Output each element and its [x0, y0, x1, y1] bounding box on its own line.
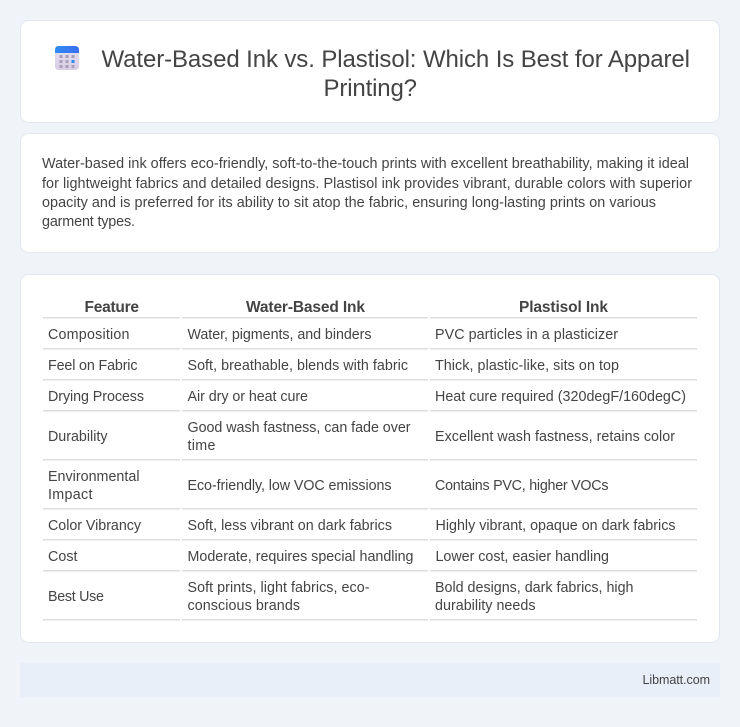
row: cost: Lower cost, easier handling: [436, 549, 609, 565]
row: durability: Good wash fastness, can fade over: [188, 420, 411, 436]
table header: Plastisol Ink: [519, 299, 608, 316]
row: composition: Water, pigments, and binders: [188, 327, 372, 343]
row: composition: [48, 327, 618, 343]
panel: summary text: [20, 134, 720, 252]
row: best use: Bold designs, dark fabrics, high: [435, 580, 634, 596]
panel: summary text: opacity and is preferred for its ability to sit atop the fabric, ensuring long-lasting prints on various: [42, 195, 656, 211]
row: durability: Durability: [48, 429, 108, 445]
title: Printing?: [324, 75, 417, 102]
row: composition: Composition: [48, 327, 130, 343]
row: best use: Soft prints, light fabrics, eco-: [188, 580, 370, 596]
footer: [20, 663, 720, 697]
row: color vibrancy: Soft, less vibrant on dark fabrics: [188, 518, 392, 534]
row: environmental impact: Impact: [48, 487, 93, 503]
panel: comparison table: [20, 274, 720, 642]
row: composition: PVC particles in a plasticizer: [435, 327, 618, 343]
row: drying process: Air dry or heat cure: [188, 389, 308, 405]
row: color vibrancy: Highly vibrant, opaque on dark fabrics: [436, 518, 676, 534]
row: drying process: Heat cure required (320degF/160degC): [435, 389, 686, 405]
row: feel on fabric: Feel on Fabric: [48, 358, 138, 374]
table header: [84, 299, 608, 316]
footer: Libmatt.com: [642, 673, 710, 687]
row: environmental impact: [48, 469, 608, 503]
row: feel on fabric: Thick, plastic-like, sits on top: [435, 358, 619, 374]
row: environmental impact: Contains PVC, higher VOCs: [435, 478, 608, 494]
row: color vibrancy: [48, 518, 676, 534]
row: environmental impact: Eco-friendly, low VOC emissions: [188, 478, 392, 494]
panel: title card: [20, 20, 720, 122]
row: durability: [48, 420, 675, 454]
row: cost: Cost: [48, 549, 78, 565]
icon: calendar: [55, 46, 79, 70]
row: environmental impact: Environmental: [48, 469, 140, 485]
row: drying process: Drying Process: [48, 389, 144, 405]
row: feel on fabric: [48, 358, 619, 374]
table header: Water-Based Ink: [246, 299, 365, 316]
title: Water-Based Ink vs. Plastisol: Which Is Best for Apparel: [102, 46, 690, 73]
row: best use: durability needs: [435, 598, 536, 614]
row: cost: [48, 549, 609, 565]
row: best use: conscious brands: [188, 598, 300, 614]
panel: summary text: garment types.: [42, 214, 135, 230]
row: color vibrancy: Color Vibrancy: [48, 518, 142, 534]
table header: Feature: [84, 299, 139, 316]
title: [102, 46, 690, 102]
row: durability: Excellent wash fastness, retains color: [435, 429, 675, 445]
panel: summary text: for lightweight fabrics and detailed designs. Plastisol ink provides vibrant, durable colors with superior: [42, 176, 692, 192]
row: best use: [48, 580, 634, 614]
row: drying process: [48, 389, 686, 405]
panel: summary text: Water-based ink offers eco-friendly, soft-to-the-touch prints with excellent breathability, making it ideal: [42, 156, 689, 172]
row: feel on fabric: Soft, breathable, blends with fabric: [188, 358, 408, 374]
row: cost: Moderate, requires special handling: [188, 549, 414, 565]
row: best use: Best Use: [48, 589, 104, 605]
row: durability: time: [188, 438, 216, 454]
